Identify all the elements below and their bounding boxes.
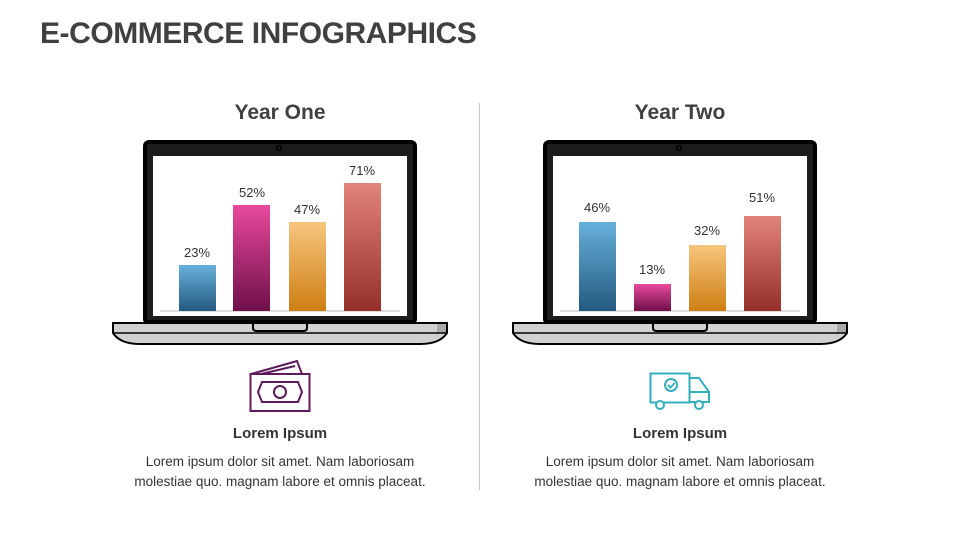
- text block: [534, 454, 826, 489]
- laptop chart: year two: [512, 140, 848, 345]
- heading: year one: Year One: [234, 101, 326, 124]
- heading: year two: Year Two: [635, 101, 725, 124]
- panel: year one: [112, 101, 448, 489]
- laptop chart: year one: 23%: [184, 245, 210, 260]
- laptop chart: year two: 46%: [584, 200, 610, 215]
- text block: molestiae quo. magnam labore et omnis placeat.: [534, 474, 826, 489]
- subheading: Lorem Ipsum: [633, 425, 727, 442]
- subheading: Lorem Ipsum: [233, 425, 327, 442]
- laptop chart: year one: 71%: [349, 163, 375, 178]
- icon: money: [250, 360, 310, 412]
- laptop chart: year one: 47%: [294, 202, 320, 217]
- laptop chart: year one: 52%: [239, 185, 265, 200]
- laptop chart: year two: 32%: [694, 223, 720, 238]
- laptop chart: year two: 13%: [639, 262, 665, 277]
- divider: [479, 103, 480, 490]
- panel: year two: [512, 101, 848, 489]
- text block: Lorem ipsum dolor sit amet. Nam laboriosam: [546, 454, 814, 469]
- laptop chart: year two: 51%: [749, 190, 775, 205]
- text block: molestiae quo. magnam labore et omnis placeat.: [134, 474, 426, 489]
- icon: delivery truck: [650, 372, 710, 410]
- text block: Lorem ipsum dolor sit amet. Nam laboriosam: [146, 454, 414, 469]
- title: E-COMMERCE INFOGRAPHICS: [40, 17, 476, 50]
- laptop chart: year one: [112, 140, 448, 345]
- text block: [134, 454, 426, 489]
